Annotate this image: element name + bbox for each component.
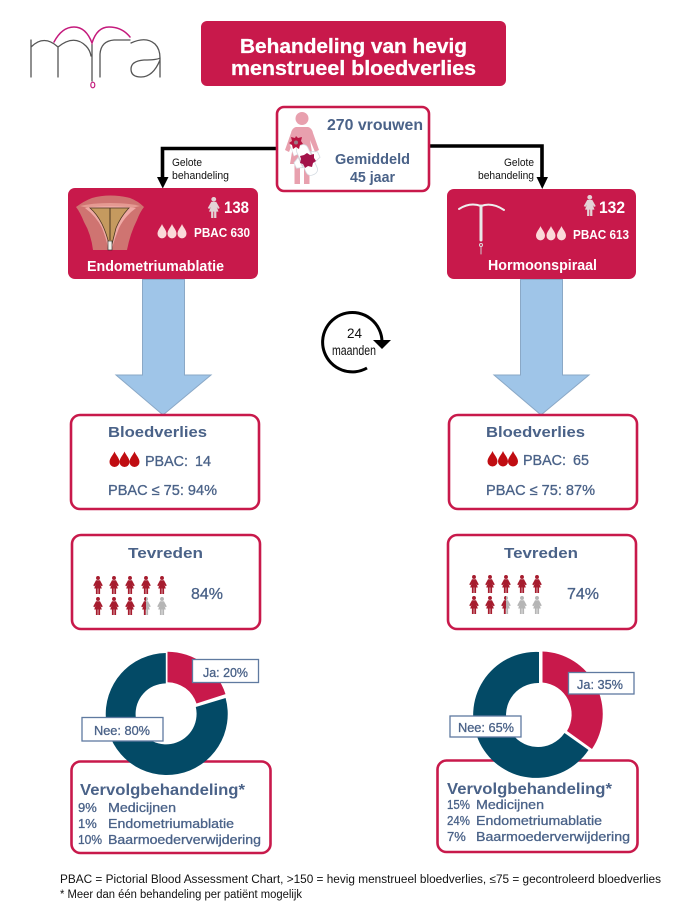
panel: bloedverlies left: PBAC ≤ 75: 94% [108, 483, 217, 499]
logo: mira [31, 27, 160, 88]
label: left allocation: Gelote [172, 157, 202, 169]
panel: vervolgbehandeling right: Vervolgbehandeling* [447, 781, 613, 798]
label: left allocation [172, 157, 229, 182]
label: ja 35: Ja: 35% [577, 677, 623, 692]
panel: vervolgbehandeling left: Medicijnen [108, 800, 176, 815]
panel: bloedverlies right: 65 [573, 453, 589, 469]
arrow: right randomisation [427, 146, 542, 178]
panel: bloedverlies left: Bloedverlies [108, 424, 207, 441]
icon: drops [536, 226, 566, 240]
panel: bloedverlies left [71, 415, 259, 509]
icon: blood drops [110, 452, 140, 467]
label: right allocation: Gelote [504, 157, 534, 169]
panel: tevreden right: Tevreden [504, 545, 578, 562]
blue arrow: right [494, 280, 589, 415]
label: ja 20 [192, 660, 258, 682]
panel: endometriumablatie: Endometriumablatie [87, 258, 224, 275]
icon: woman [584, 195, 596, 216]
panel: bloedverlies left: PBAC: [145, 454, 188, 470]
icon array: 84% [93, 576, 167, 615]
title banner: menstrueel bloedverlies [231, 58, 476, 80]
panel: bloedverlies right: PBAC: [523, 453, 566, 469]
icon: drops [158, 224, 186, 238]
panel: tevreden right [448, 535, 636, 629]
panel: population: Gemiddeld [335, 152, 410, 168]
icon: IUD [459, 205, 504, 254]
label: ja 35 [568, 672, 634, 694]
footnote: * Meer dan één behandeling per patiënt mogelijk [60, 889, 302, 901]
label: right allocation: behandeling [478, 170, 534, 182]
title banner: Behandeling van hevig [240, 36, 467, 58]
panel: bloedverlies left: 14 [195, 454, 211, 470]
panel: endometriumablatie [68, 188, 258, 279]
icon: uterus [76, 196, 144, 250]
panel: vervolgbehandeling right: 7% [447, 829, 466, 844]
label: left allocation: behandeling [172, 170, 229, 182]
panel: hormoonspiraal: 132 [599, 198, 625, 217]
panel: vervolgbehandeling left [72, 762, 270, 853]
panel: tevreden left: 84% [191, 586, 223, 603]
panel: population [277, 107, 429, 191]
panel: vervolgbehandeling left: Baarmoederverwijdering [108, 832, 261, 847]
donut chart: left [106, 652, 228, 775]
icon: 24 months cycle: maanden [332, 343, 376, 358]
title banner [201, 21, 506, 86]
label: nee 65: Nee: 65% [458, 720, 514, 735]
arrow: left randomisation [162, 148, 277, 178]
panel: vervolgbehandeling right: Medicijnen [476, 797, 544, 812]
panel: vervolgbehandeling left: 1% [78, 816, 97, 831]
icon: blood drops [488, 451, 518, 466]
panel: vervolgbehandeling left: 9% [78, 800, 97, 815]
panel: vervolgbehandeling left: Endometriumablatie [108, 816, 234, 831]
label: nee 80 [82, 718, 163, 741]
label: nee 65 [450, 716, 521, 737]
panel: hormoonspiraal [447, 189, 636, 279]
donut chart: right [473, 652, 603, 778]
icon: 24 months cycle [323, 312, 391, 372]
panel: endometriumablatie: PBAC 630 [194, 225, 250, 240]
blue arrow: left [116, 280, 211, 415]
panel: bloedverlies right: Bloedverlies [486, 424, 585, 441]
panel: vervolgbehandeling right: 15% [447, 797, 470, 812]
icon: 24 months cycle: 24 [347, 325, 362, 341]
panel: population: 270 vrouwen [327, 117, 423, 134]
footnote: PBAC = Pictorial Blood Assessment Chart, >150 = hevig menstrueel bloedverlies, ≤75 = gecontroleerd bloedverlies [60, 874, 661, 886]
panel: vervolgbehandeling right [438, 760, 638, 852]
label: nee 80: Nee: 80% [94, 723, 150, 738]
panel: vervolgbehandeling right: Baarmoederverwijdering [476, 829, 630, 844]
panel: tevreden left [72, 535, 260, 629]
panel: vervolgbehandeling left: 10% [78, 832, 102, 847]
panel: vervolgbehandeling right: Endometriumablatie [476, 813, 602, 828]
panel: vervolgbehandeling right: 24% [447, 813, 470, 828]
panel: tevreden right: 74% [567, 586, 599, 603]
panel: tevreden left: Tevreden [128, 545, 203, 562]
footnote [60, 874, 661, 901]
panel: vervolgbehandeling left: Vervolgbehandeling* [80, 782, 246, 799]
panel: hormoonspiraal: Hormoonspiraal [488, 257, 597, 274]
panel: hormoonspiraal: PBAC 613 [573, 227, 629, 242]
icon: woman [208, 197, 220, 218]
arrow head: right [536, 177, 548, 189]
label: ja 20: Ja: 20% [203, 665, 248, 680]
panel: bloedverlies right: PBAC ≤ 75: 87% [486, 483, 595, 499]
icon array: 74% [469, 575, 542, 614]
arrow head: left [157, 177, 168, 188]
panel: endometriumablatie: 138 [224, 198, 249, 217]
label: right allocation [478, 157, 534, 182]
panel: bloedverlies right [449, 415, 637, 509]
icon: woman with pads [285, 112, 326, 184]
panel: population: 45 jaar [350, 170, 395, 186]
